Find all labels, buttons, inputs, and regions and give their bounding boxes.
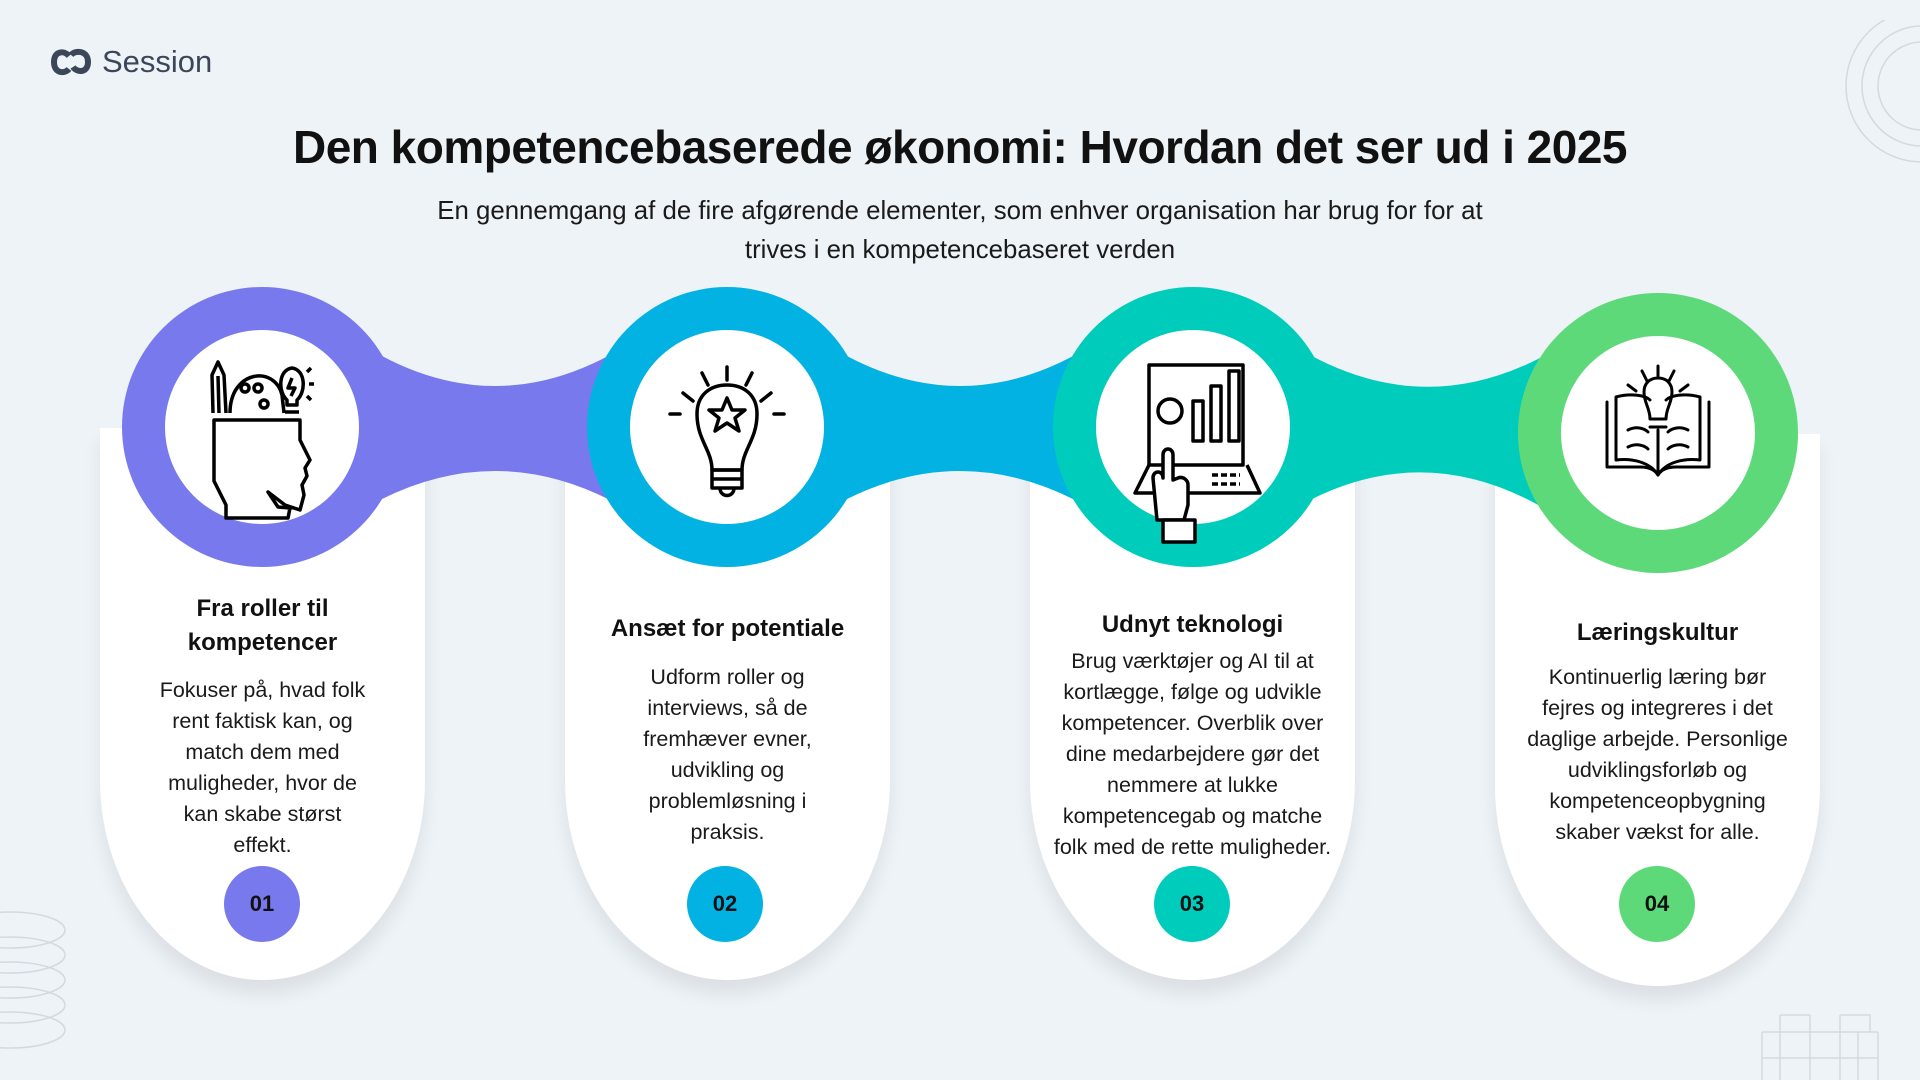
- title: Den kompetencebaserede økonomi: Hvordan det ser ud i 2025: [293, 121, 1627, 173]
- card 4 heading: Læringskultur: [1577, 619, 1738, 646]
- icon: bulb with star: [670, 367, 784, 496]
- card 3 heading: Udnyt teknologi: [1102, 611, 1283, 638]
- badge 02: 02: [713, 891, 737, 916]
- badge 04: 04: [1645, 891, 1669, 916]
- card 2 heading: Ansæt for potentiale: [611, 615, 844, 642]
- card 1 heading: Fra roller til: [196, 595, 329, 622]
- subtitle: En gennemgang af de fire afgørende elementer, som enhver organisation har brug for for at trives i en kompetencebaseret verden: [437, 197, 1483, 264]
- card 1 heading: [188, 595, 337, 656]
- card 2: [565, 428, 890, 980]
- connector 2-3: [727, 355, 1193, 500]
- circle 1: [122, 287, 402, 567]
- badge 01: [224, 866, 300, 942]
- badge 02: [687, 866, 763, 942]
- icon: head: [212, 362, 314, 518]
- circle 3: [1053, 287, 1333, 567]
- logo: Session: [102, 44, 212, 79]
- decoration: concentric circles top right: [1845, 20, 1920, 163]
- card 4 body: Kontinuerlig læring bør fejres og integreres i det daglige arbejde. Personlige udviklingsforløb og kompetenceopbygning skaber vækst for alle.: [1527, 665, 1788, 844]
- card 1 body: Fokuser på, hvad folk rent faktisk kan, og match dem med muligheder, hvor de kan skabe størst effekt.: [160, 678, 365, 857]
- card 1: [100, 428, 425, 980]
- circle 2: [587, 287, 867, 567]
- decoration: grid bottom right: [1761, 1014, 1879, 1080]
- card 2 body: Udform roller og interviews, så de fremhæver evner, udvikling og problemløsning i praksis.: [643, 665, 812, 844]
- circle 4: [1518, 293, 1798, 573]
- connector 1-2: [262, 355, 727, 500]
- card 3 body: Brug værktøjer og AI til at kortlægge, følge og udvikle kompetencer. Overblik over dine medarbejdere gør det nemmere at lukke kompetencegab og matche folk med de rette muligheder.: [1054, 649, 1331, 859]
- icon: open book with bulb: [1607, 366, 1709, 475]
- icon: laptop with chart: [1135, 365, 1260, 542]
- decoration: stacked ellipses bottom left: [0, 911, 66, 1049]
- logo: [51, 44, 212, 79]
- card 3: [1030, 428, 1355, 980]
- connector 3-4: [1193, 355, 1658, 506]
- badge 01: 01: [250, 891, 274, 916]
- badge 03: 03: [1180, 891, 1204, 916]
- badge 03: [1154, 866, 1230, 942]
- badge 04: [1619, 866, 1695, 942]
- card 4: [1495, 434, 1820, 986]
- card 1 heading: kompetencer: [188, 629, 337, 656]
